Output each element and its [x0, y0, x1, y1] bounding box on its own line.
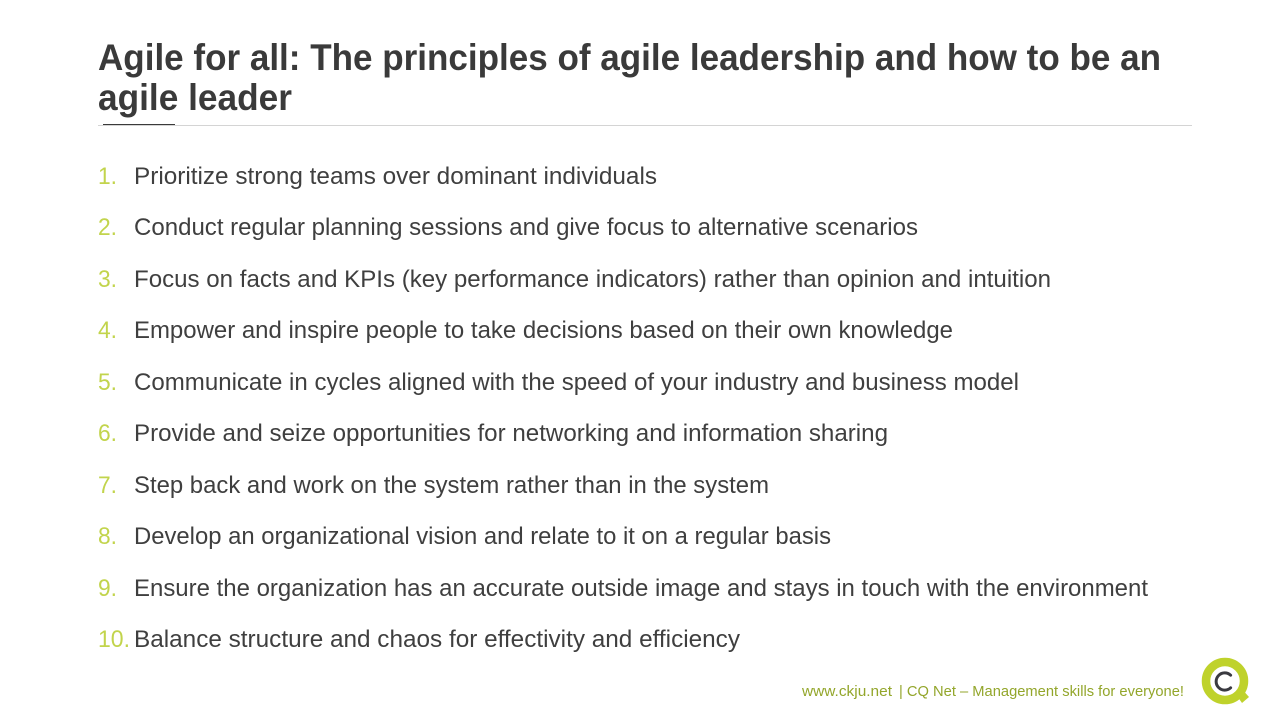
item 10: 10.	[98, 626, 130, 653]
item 7: Step back and work on the system rather than in the system	[134, 472, 769, 499]
item 7: 7.	[98, 472, 117, 499]
footer text: www.ckju.net	[801, 684, 892, 700]
icon: CQ logo	[1206, 662, 1249, 703]
item 2: 2.	[98, 214, 117, 241]
item 4: 4.	[98, 317, 117, 344]
item 9: 9.	[98, 575, 117, 602]
title: Agile for all: The principles of agile leadership and how to be an	[98, 37, 1161, 78]
title: agile leader	[98, 77, 292, 118]
footer text: | CQ Net – Management skills for everyone!	[899, 684, 1184, 700]
item 5: 5.	[98, 369, 117, 396]
item 1: 1.	[98, 163, 117, 190]
title underline	[98, 124, 1192, 126]
item 9: Ensure the organization has an accurate outside image and stays in touch with the environment	[134, 575, 1148, 602]
item 2: Conduct regular planning sessions and give focus to alternative scenarios	[134, 214, 918, 241]
title	[98, 37, 1161, 118]
item 1: Prioritize strong teams over dominant individuals	[134, 163, 657, 190]
item 6: Provide and seize opportunities for networking and information sharing	[134, 420, 888, 447]
item 5: Communicate in cycles aligned with the speed of your industry and business model	[134, 369, 1019, 396]
item 8: Develop an organizational vision and relate to it on a regular basis	[134, 523, 831, 550]
item 3: Focus on facts and KPIs (key performance indicators) rather than opinion and intuition	[134, 266, 1051, 293]
item 6: 6.	[98, 420, 117, 447]
item 8: 8.	[98, 523, 117, 550]
item 10: Balance structure and chaos for effectivity and efficiency	[134, 626, 740, 653]
item 3: 3.	[98, 266, 117, 293]
item 4: Empower and inspire people to take decisions based on their own knowledge	[134, 317, 953, 344]
numbered list of principles	[98, 163, 1148, 653]
